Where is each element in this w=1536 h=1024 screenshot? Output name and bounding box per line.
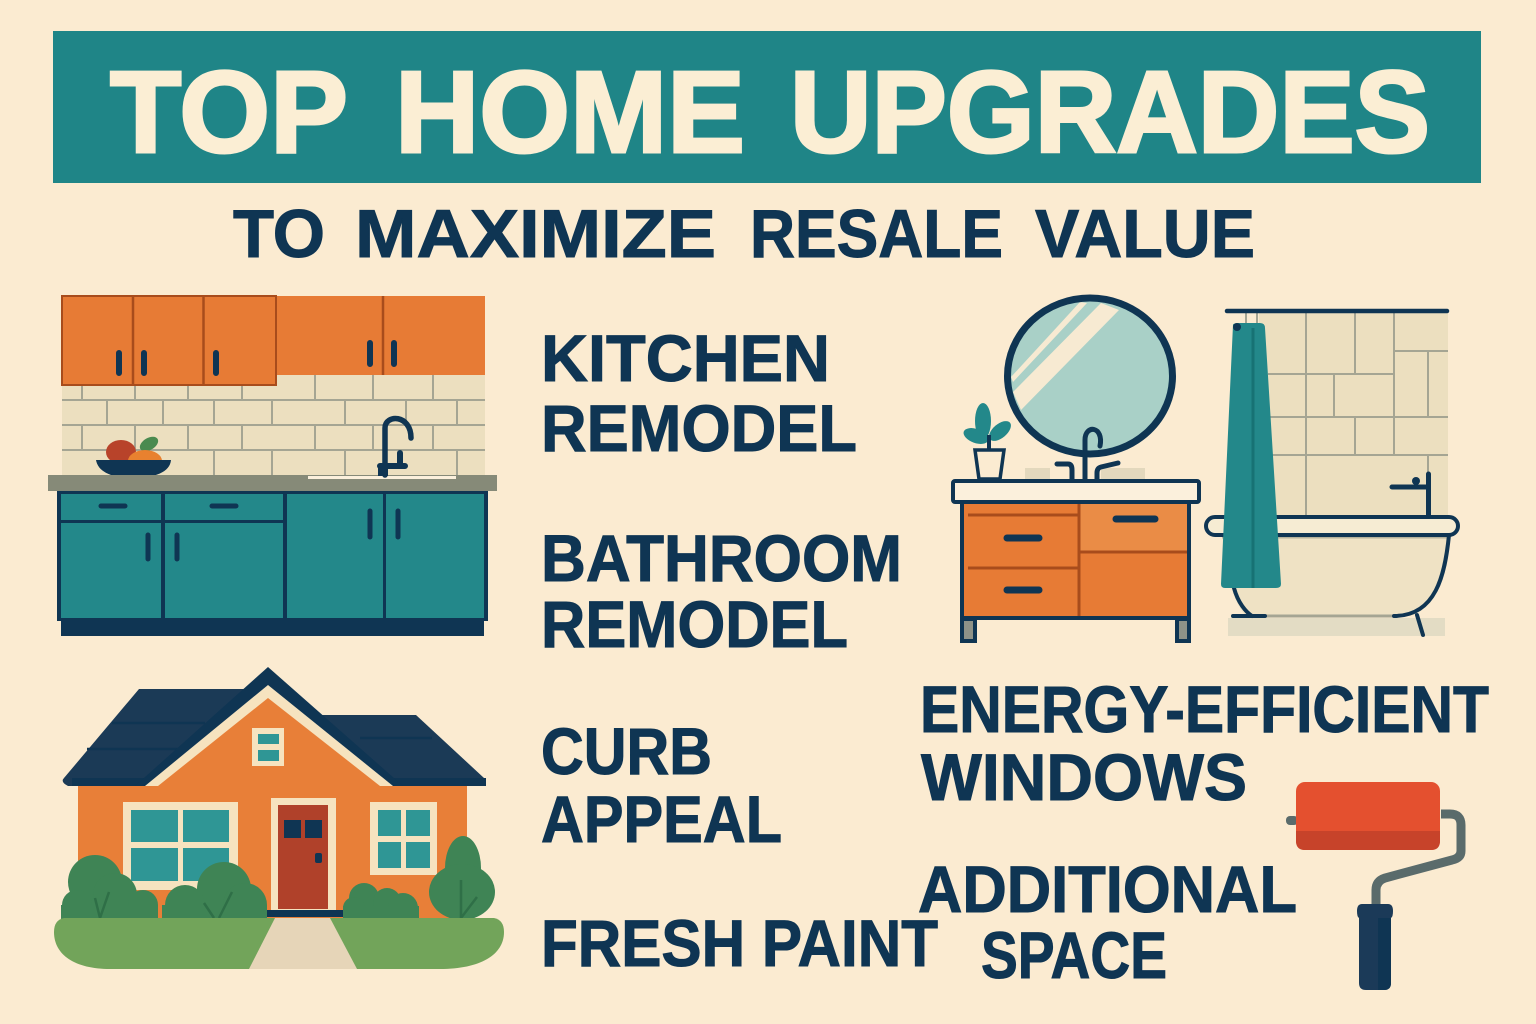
front door bbox=[267, 798, 343, 917]
label: kitchen remodel: REMODEL bbox=[541, 391, 857, 465]
subtitle: MAXIMIZE bbox=[355, 196, 716, 272]
label: bathroom remodel: REMODEL bbox=[541, 587, 848, 661]
mirror bbox=[1008, 298, 1172, 454]
shower rod bbox=[1227, 309, 1447, 313]
faucet bbox=[1057, 429, 1118, 480]
walls bbox=[78, 786, 467, 918]
fruit bowl bbox=[96, 434, 171, 478]
label: energy-efficient windows bbox=[920, 672, 1489, 814]
label: fresh paint: FRESH PAINT bbox=[541, 906, 938, 980]
plant bbox=[961, 403, 1014, 479]
roof bbox=[63, 689, 486, 786]
label: additional space: ADDITIONAL bbox=[918, 852, 1297, 926]
label: curb appeal bbox=[541, 714, 782, 856]
label: bathroom remodel: BATHROOM bbox=[541, 521, 902, 595]
subtitle: TO bbox=[233, 196, 325, 272]
right window bbox=[370, 802, 437, 875]
attic window bbox=[252, 728, 284, 766]
label: additional space: SPACE bbox=[981, 918, 1167, 992]
subtitle: VALUE bbox=[1035, 196, 1255, 272]
icon: paint roller bbox=[1286, 782, 1461, 990]
label: additional space bbox=[918, 852, 1297, 992]
lawn bbox=[54, 918, 504, 969]
title banner bbox=[53, 31, 1481, 183]
label: curb appeal: CURB bbox=[541, 714, 712, 788]
walkway bbox=[249, 918, 357, 969]
illustration: bathroom bbox=[953, 298, 1458, 641]
bathtub bbox=[1206, 474, 1458, 635]
bushes bbox=[61, 836, 495, 927]
title banner: UPGRADES bbox=[790, 47, 1430, 177]
illustration: kitchen bbox=[48, 296, 497, 636]
shower curtain bbox=[1221, 312, 1281, 588]
faucet bbox=[378, 419, 411, 476]
label: bathroom remodel bbox=[541, 521, 902, 661]
subtitle: RESALE bbox=[750, 196, 1003, 272]
label: energy-efficient windows: WINDOWS bbox=[921, 740, 1247, 814]
label: kitchen remodel: KITCHEN bbox=[541, 321, 830, 395]
large window bbox=[123, 802, 238, 890]
tile wall bbox=[1228, 313, 1448, 636]
illustration: house bbox=[54, 667, 504, 969]
title banner: HOME bbox=[395, 47, 745, 177]
label: curb appeal: APPEAL bbox=[541, 782, 782, 856]
vanity bbox=[953, 481, 1199, 641]
title banner: TOP bbox=[110, 47, 348, 177]
subtitle bbox=[233, 196, 1255, 272]
label: kitchen remodel bbox=[541, 321, 857, 465]
